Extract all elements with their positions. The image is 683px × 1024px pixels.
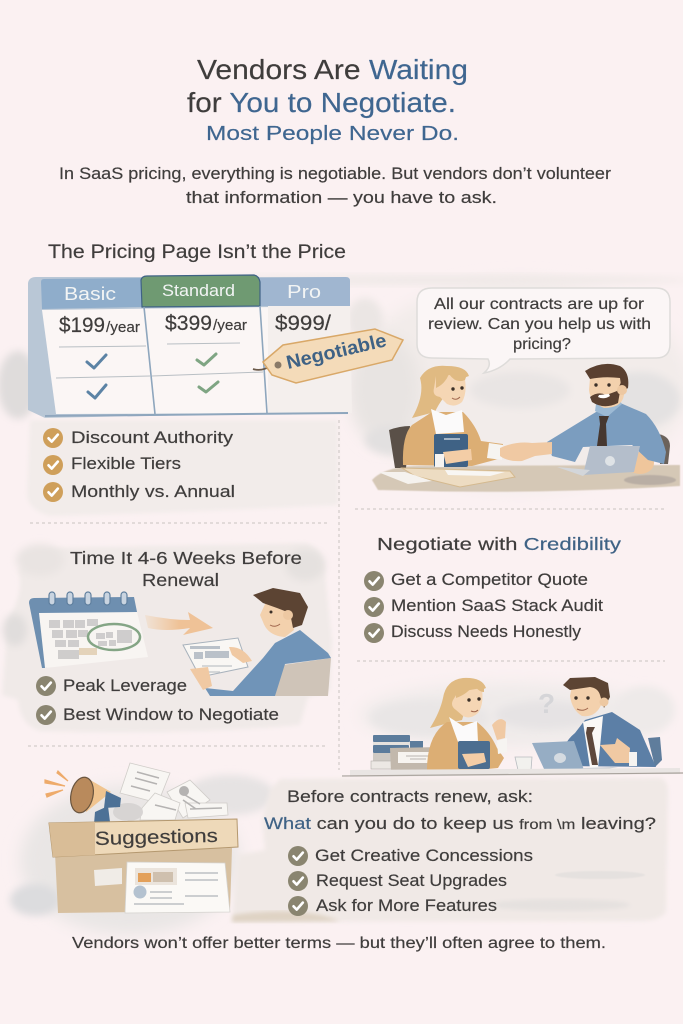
question mark icon: ? (538, 688, 555, 719)
heading: timing: Time It 4-6 Weeks Before (70, 548, 302, 568)
price tag: Negotiable: Negotiable (284, 330, 389, 374)
header: Pro (260, 277, 350, 306)
item: Mention SaaS Stack Audit (391, 597, 603, 615)
chairs (389, 426, 410, 468)
panel: renewal question (232, 778, 668, 922)
question text (264, 788, 656, 833)
illustration: handshake scene (372, 364, 680, 492)
illustration: suggestions box (45, 763, 238, 913)
papers (402, 468, 515, 487)
speech bubble: review. Can you help us with (428, 316, 651, 333)
woman (427, 678, 507, 770)
heading: pricing page: The Pricing Page Isn’t the Price (48, 241, 346, 263)
credibility checklist (364, 571, 603, 643)
speech bubble: pricing? (513, 336, 571, 353)
heading: timing (70, 548, 302, 590)
table check marks (87, 354, 218, 398)
title: Most People Never Do. (206, 123, 459, 145)
heading: credibility: Negotiate with Credibility (377, 534, 621, 554)
item (43, 482, 235, 502)
books (371, 735, 423, 769)
item (43, 455, 181, 475)
illustration: discussion scene (342, 677, 683, 777)
question text: Before contracts renew, ask: (287, 788, 533, 806)
heading: timing: Renewal (142, 570, 219, 590)
item: Request Seat Upgrades (316, 872, 507, 890)
hands (500, 442, 552, 461)
title: for You to Negotiate. (187, 87, 456, 118)
icon: calendar (29, 592, 148, 668)
nameplate box (390, 747, 445, 772)
laptop (583, 446, 640, 475)
prices: /year (106, 319, 140, 336)
box (55, 848, 232, 913)
illustration: man reading (183, 588, 331, 696)
footer text: Vendors won’t offer better terms — but they’ll often agree to them. (72, 935, 606, 952)
speech bubble (417, 288, 670, 373)
timing checklist (36, 676, 279, 725)
watercolour wash backgrounds (0, 275, 683, 935)
panel: pricing table (28, 275, 352, 418)
prices: $999/ (275, 312, 331, 335)
item (36, 676, 187, 696)
dashed dividers (28, 420, 665, 770)
man (547, 364, 666, 474)
renewal checklist (288, 846, 533, 916)
header: Basic: Basic (64, 284, 116, 304)
item: Peak Leverage (63, 677, 187, 695)
papers (120, 763, 228, 820)
title (187, 54, 468, 145)
cup (515, 757, 532, 770)
title: Vendors Are Waiting (197, 54, 468, 85)
panel: pricing checklist (27, 420, 338, 516)
prices (59, 312, 331, 337)
intro text: In SaaS pricing, everything is negotiable. But vendors don’t volunteer (59, 165, 612, 183)
item: Discount Authority (71, 429, 234, 447)
prices: $399 (165, 312, 212, 335)
item: Discuss Needs Honestly (391, 623, 582, 641)
panel: timing (2, 543, 332, 732)
header: Pro: Pro (287, 282, 321, 302)
question text: What can you do to keep us from \m leaving? (264, 814, 656, 833)
item: Flexible Tiers (71, 455, 181, 473)
illustration: suggestions box: Suggestions (95, 826, 218, 850)
intro text: that information — you have to ask. (186, 189, 497, 207)
prices: $199 (59, 314, 105, 337)
header: Standard: Standard (162, 281, 235, 300)
price tag: Negotiable (253, 329, 403, 383)
item: Get Creative Concessions (315, 847, 533, 865)
prices: /year (213, 317, 247, 334)
item: Best Window to Negotiate (63, 706, 279, 724)
arrow (145, 612, 213, 635)
item: Ask for More Features (316, 897, 497, 915)
desk (350, 768, 680, 777)
document on box (125, 862, 230, 913)
megaphone (45, 771, 121, 824)
man (561, 677, 662, 768)
column lines (144, 306, 267, 414)
header: Standard (141, 275, 260, 307)
header: Basic (41, 278, 142, 309)
speech bubble: All our contracts are up for (434, 296, 645, 313)
desk (372, 465, 680, 492)
intro text (59, 165, 612, 207)
item: Get a Competitor Quote (391, 571, 588, 589)
woman (403, 366, 503, 467)
item (43, 428, 234, 448)
item: Monthly vs. Annual (71, 483, 235, 501)
laptop (532, 741, 584, 771)
